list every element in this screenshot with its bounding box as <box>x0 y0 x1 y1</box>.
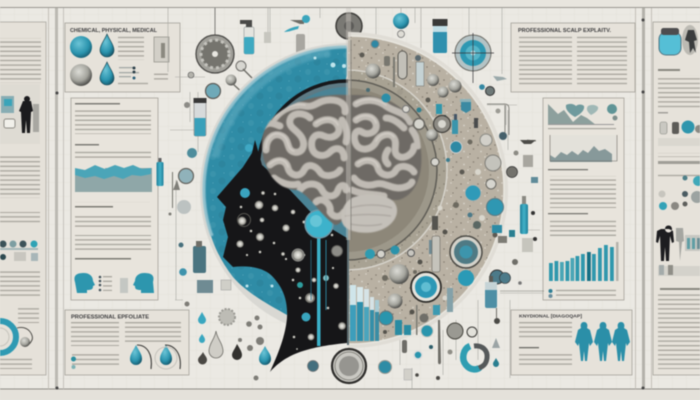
scattered top-left instruments <box>178 8 362 184</box>
centre split line <box>346 8 351 345</box>
panel: left report <box>71 98 164 300</box>
icon: drops group <box>198 312 271 365</box>
figure panel <box>0 84 40 144</box>
brain fold shading <box>266 99 394 167</box>
icon: teal head left <box>74 273 95 293</box>
small disc objects <box>360 52 498 334</box>
legend dots <box>71 356 76 369</box>
legend <box>548 288 616 298</box>
icon: pump bottle top <box>284 15 310 78</box>
heading: CHEMICAL, PHYSICAL, MEDICAL <box>70 28 158 34</box>
panel: chemical physical medical <box>65 23 180 92</box>
icon: teal figure <box>612 322 630 361</box>
black head silhouette <box>217 140 347 372</box>
icon: circles <box>658 176 700 210</box>
small vials <box>685 235 700 251</box>
icon: jar <box>659 28 681 55</box>
icon: teal ringed lens right <box>450 236 482 268</box>
icon: teal ringed lens centre <box>411 272 441 302</box>
icon: vial bottle top <box>432 19 448 53</box>
icon: bottle <box>156 158 164 186</box>
icon: dark body figure <box>656 225 674 261</box>
teal probe <box>305 210 333 346</box>
panel: professional scalp explainer <box>511 23 635 92</box>
panel: individual diagnosis <box>511 310 632 375</box>
icon: large dial bottom <box>332 349 366 383</box>
icon: water drop <box>100 62 114 85</box>
text block <box>125 321 181 345</box>
panel: far right column <box>653 22 700 375</box>
small dots <box>168 212 264 380</box>
star field <box>236 191 346 350</box>
cerebellum <box>341 195 397 233</box>
icon: lens <box>206 84 220 98</box>
icon: teal vial right <box>485 276 497 308</box>
panel: professional exfoliate <box>65 310 189 375</box>
heading: KNYDIONAL [DIAGOQAP] <box>519 314 582 320</box>
icon: drop with arc <box>155 345 180 369</box>
ringed stars <box>238 144 342 322</box>
right dial bars <box>350 285 379 341</box>
text block <box>118 36 144 60</box>
icon: silver sphere <box>70 64 92 86</box>
brain folds <box>262 100 418 216</box>
top objects <box>393 13 409 29</box>
bottom instruments <box>168 172 392 383</box>
line chart <box>550 135 617 162</box>
product icons <box>658 120 700 146</box>
text block <box>71 321 119 346</box>
mountain chart <box>548 104 618 125</box>
icon: teal head right <box>133 273 154 293</box>
ring and inner disc <box>247 70 447 270</box>
people icons row <box>0 240 38 261</box>
icon: gauge wheel <box>196 8 234 73</box>
text block <box>519 321 572 339</box>
icon: vial left <box>194 98 206 136</box>
icon: small drop lower right <box>493 358 499 367</box>
icon: body in oval <box>682 25 698 55</box>
icon: teal sphere <box>70 36 92 58</box>
icon: drop with arc <box>130 345 151 369</box>
bottom cluster <box>379 288 477 380</box>
teal scalp band <box>204 47 347 315</box>
icon: water drop <box>100 34 114 57</box>
icon: grey body figure <box>676 228 684 261</box>
right scatter of lab objects <box>360 13 544 380</box>
outer light ring <box>200 43 494 337</box>
legend rows <box>119 66 139 80</box>
icon: spray bottle <box>240 20 254 54</box>
text block <box>577 36 627 86</box>
blueprint connector lines <box>168 8 543 389</box>
panel: right charts <box>543 98 624 300</box>
heading: PROFESSIONAL EPFOLIATE <box>71 314 149 320</box>
pipes and tool right <box>487 104 536 141</box>
icon: beaker <box>154 37 169 62</box>
brain <box>262 95 421 233</box>
icon: dark gauge <box>336 13 362 39</box>
icon: flask lamp <box>172 172 191 214</box>
text block <box>519 36 572 86</box>
donut chart <box>463 346 487 369</box>
area chart <box>75 163 152 192</box>
teal ring chart <box>0 321 32 353</box>
panel: far left column <box>0 22 46 375</box>
right half beige disc <box>348 32 508 348</box>
icon: dark bottle <box>193 241 206 273</box>
icon: blue dot <box>308 360 318 372</box>
text block <box>519 352 572 366</box>
icon: teal figure <box>594 322 612 361</box>
icon: tall teal bottle <box>520 196 535 234</box>
bar chart <box>549 242 618 281</box>
icon: grey gear <box>219 309 235 325</box>
heading: PROFESSIONAL SCALP EXPLAITV. <box>518 28 612 34</box>
icon: target dial <box>452 33 494 83</box>
cluster objects on disc <box>366 64 462 308</box>
far left text block top <box>0 38 41 83</box>
small legend <box>99 276 128 293</box>
icon: teal figure <box>575 322 593 361</box>
